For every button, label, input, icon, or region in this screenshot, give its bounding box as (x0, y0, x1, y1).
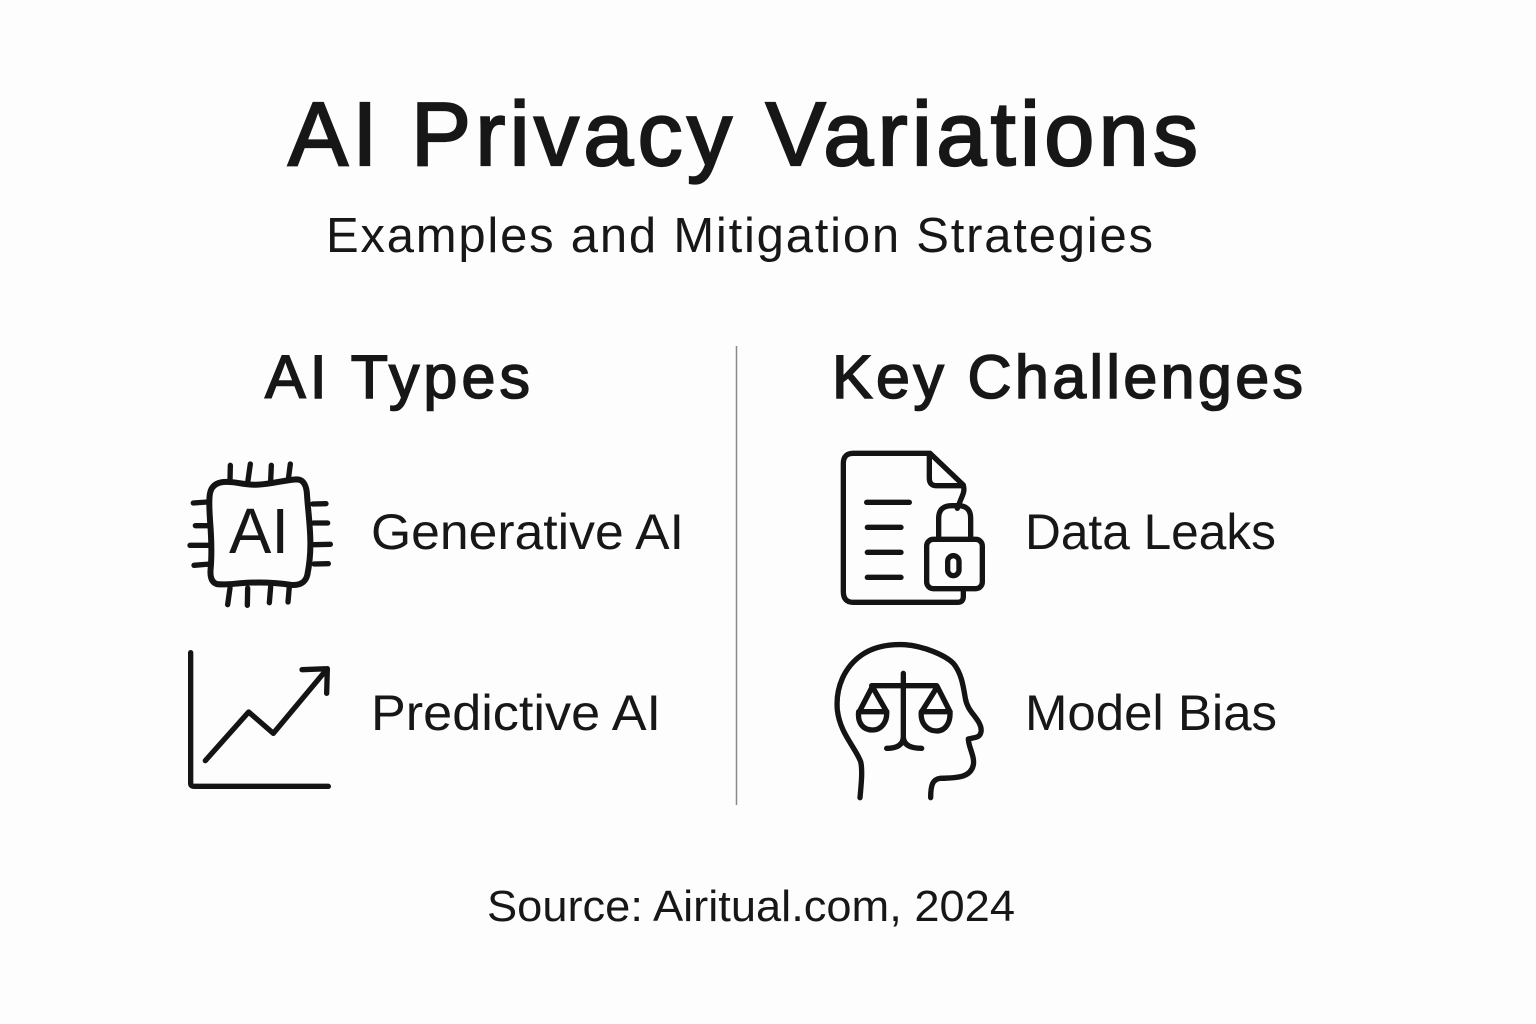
subtitle: Examples and Mitigation Strategies (326, 209, 1153, 263)
icon: AI chip: AI (229, 495, 289, 567)
label: Model Bias: Model Bias (1025, 685, 1277, 741)
panel: key challenges (832, 343, 1303, 798)
panel: AI types (190, 343, 684, 786)
icon: locked document (843, 453, 982, 602)
heading: AI Types: AI Types (265, 343, 530, 411)
divider (736, 346, 738, 805)
title: AI Privacy Variations (288, 85, 1198, 185)
icon: growth chart (191, 653, 328, 786)
label: Generative AI: Generative AI (371, 504, 684, 560)
heading: Key Challenges: Key Challenges (832, 343, 1303, 411)
icon: head with scales (837, 645, 981, 798)
label: Data Leaks: Data Leaks (1025, 504, 1276, 560)
label: Predictive AI: Predictive AI (371, 685, 661, 741)
source note: Source: Airitual.com, 2024 (487, 882, 1015, 931)
icon: AI chip (190, 464, 330, 605)
